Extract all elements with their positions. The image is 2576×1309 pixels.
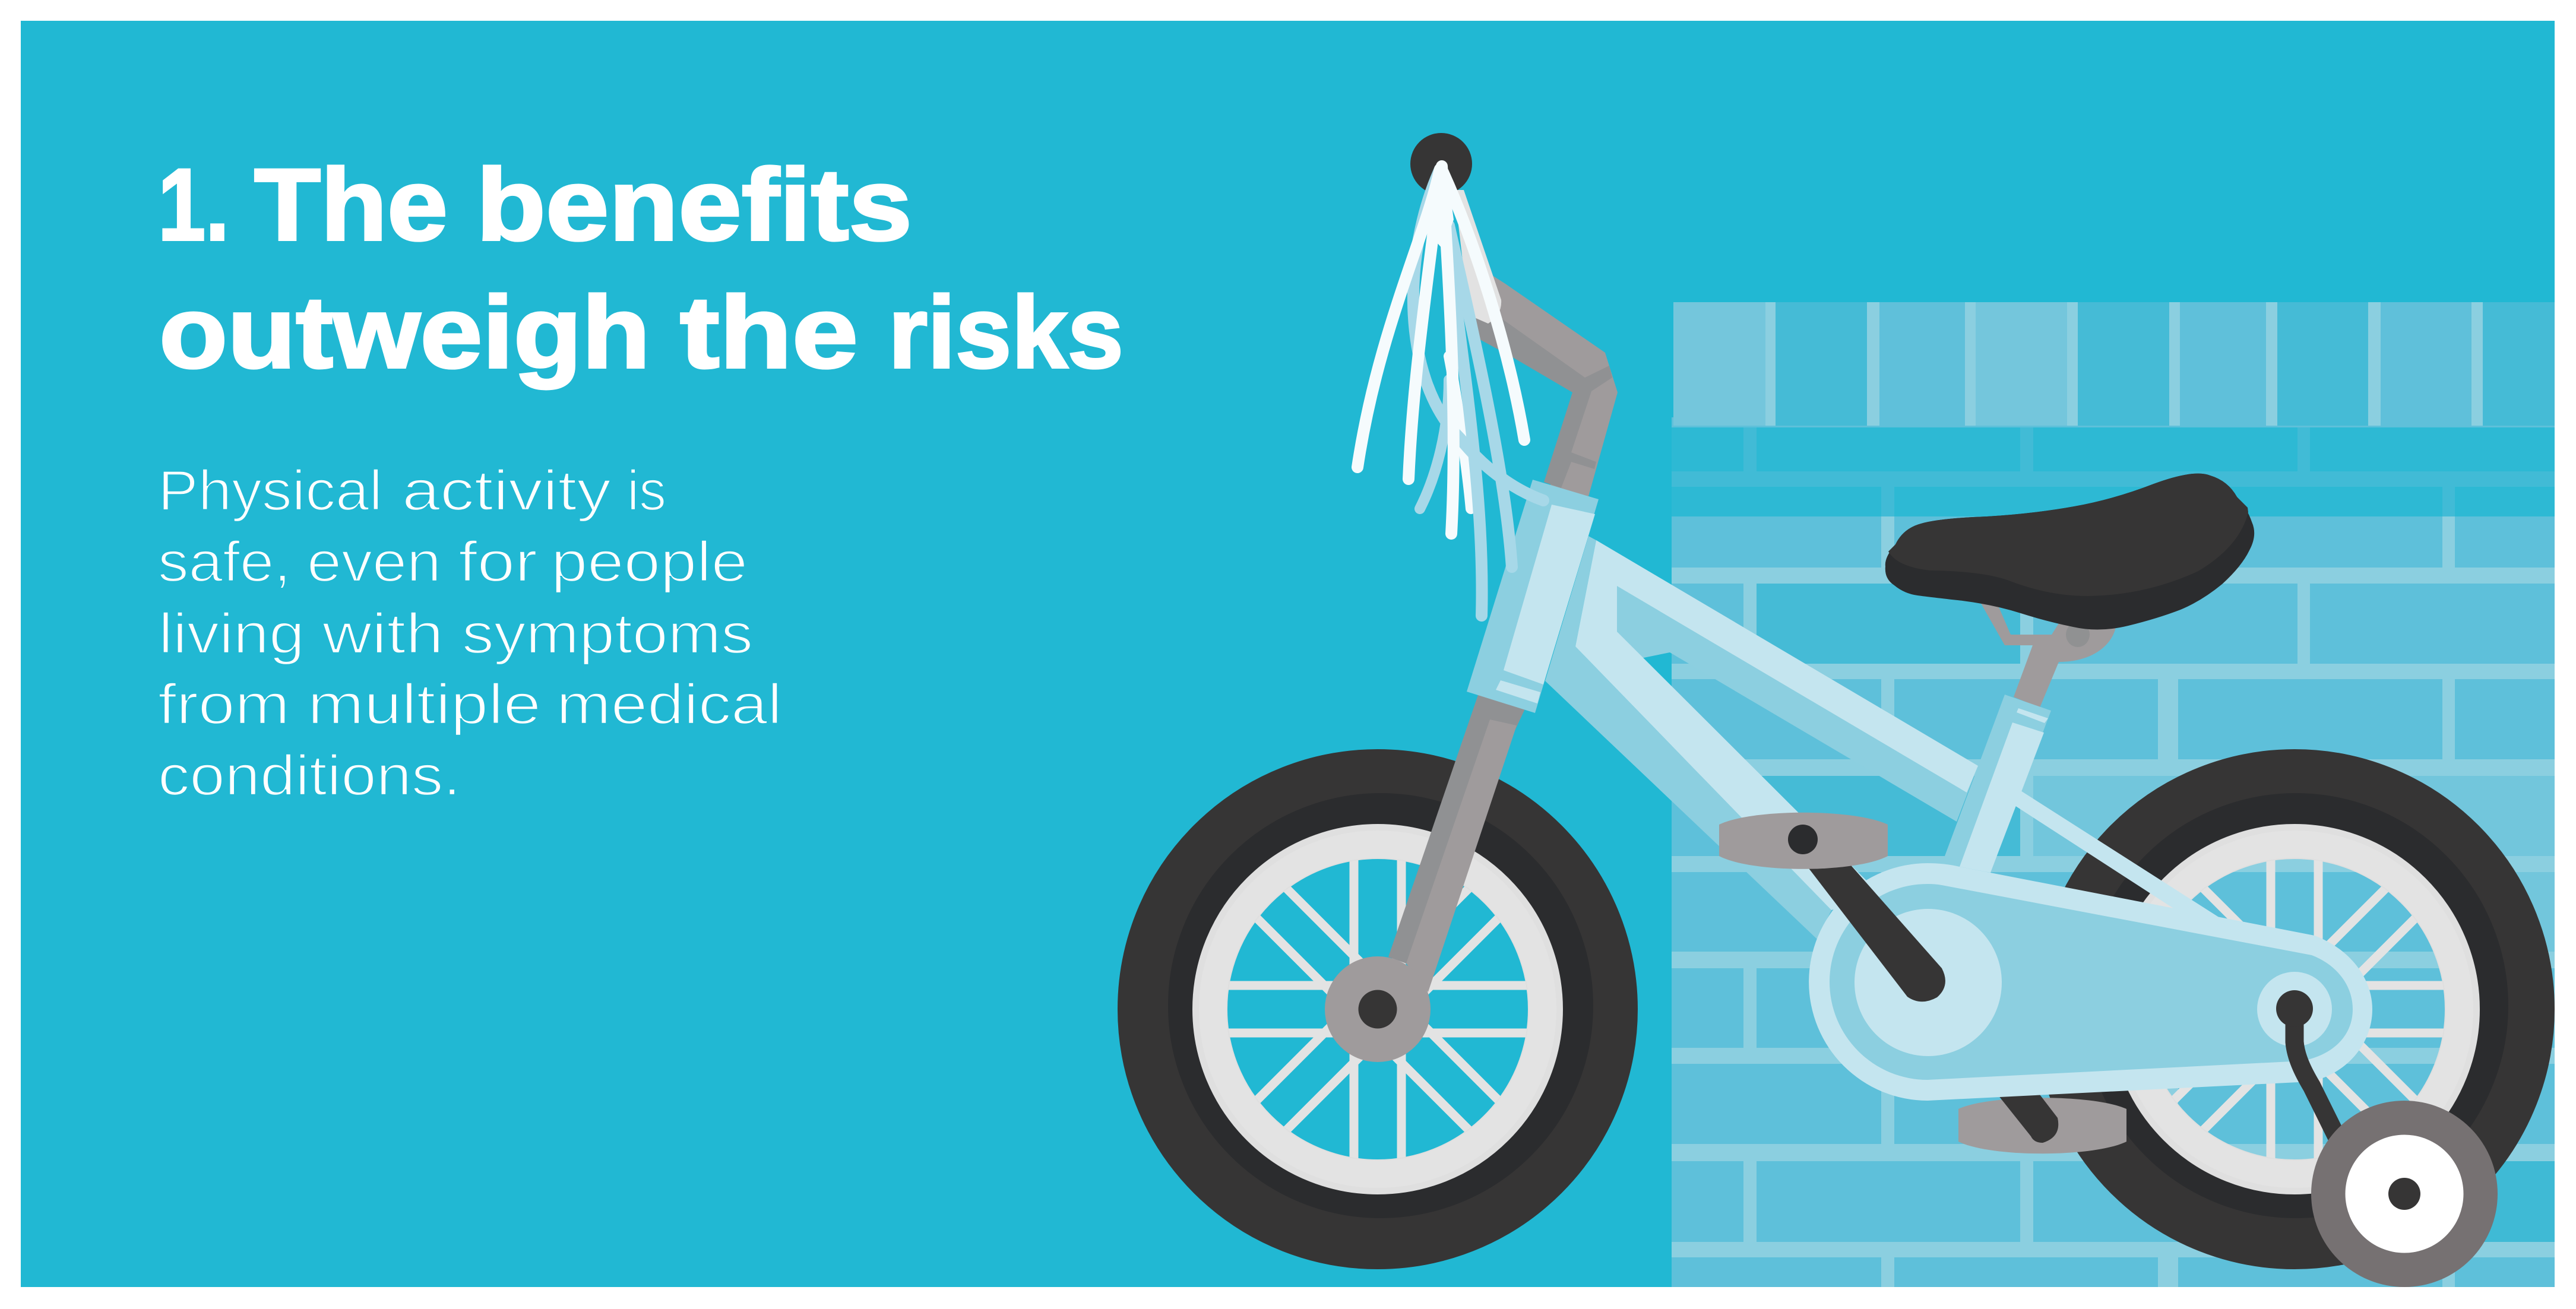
body text: for — [458, 530, 537, 594]
chain guard — [1809, 863, 2372, 1101]
heading: benefits — [476, 148, 912, 262]
spokes — [2143, 857, 2447, 1161]
heading: risks — [888, 275, 1124, 389]
bike frame — [1467, 480, 2233, 939]
heading: The — [254, 148, 448, 262]
front hub — [1325, 956, 1431, 1062]
tyre — [2075, 790, 2514, 1228]
training wheel arm — [2276, 990, 2340, 1143]
body text: Physical — [158, 459, 382, 522]
tassels — [1357, 166, 1543, 616]
upper crank arm — [1805, 862, 1945, 1001]
brick wall — [1672, 302, 2555, 1287]
upper pedal — [1719, 813, 1888, 869]
rear wheel — [2075, 790, 2514, 1228]
chainring — [1855, 909, 2002, 1056]
seat tube — [1945, 695, 2051, 873]
heading: the — [680, 275, 858, 389]
body text: symptoms — [462, 602, 753, 665]
body text: with — [322, 602, 444, 665]
seat post and bracket — [1980, 601, 2116, 708]
body text: is — [627, 459, 666, 522]
main frame tubes — [1575, 540, 1978, 910]
body text: multiple — [308, 673, 541, 736]
body text — [158, 459, 782, 807]
body text: medical — [556, 673, 782, 736]
tyre — [1159, 790, 1597, 1228]
handlebar grip — [1454, 190, 1501, 324]
body text: safe, — [158, 530, 291, 594]
lower pedal — [1958, 1098, 2126, 1153]
training wheel — [2311, 1101, 2498, 1287]
frame shadow tubes — [1596, 540, 1978, 822]
body text: even — [307, 530, 441, 594]
body text: from — [158, 673, 290, 736]
seat stay — [2015, 791, 2233, 926]
heading: 1. — [158, 148, 229, 262]
handlebar stem — [1469, 274, 1618, 496]
body text: activity — [402, 459, 611, 522]
front fork — [1325, 692, 1526, 1062]
saddle — [1885, 474, 2254, 630]
heading: outweigh — [159, 275, 650, 389]
rear hub — [2257, 972, 2332, 1047]
head tube — [1467, 480, 1599, 713]
spokes — [1226, 857, 1530, 1161]
rim — [1210, 842, 1545, 1177]
body text: living — [159, 602, 305, 665]
front wheel — [1159, 790, 1597, 1228]
rim — [2127, 842, 2462, 1177]
body text: conditions. — [158, 744, 461, 807]
heading — [158, 148, 1124, 389]
body text: people — [551, 530, 748, 594]
lower crank arm — [1996, 1092, 2058, 1143]
bell end — [1410, 133, 1472, 195]
